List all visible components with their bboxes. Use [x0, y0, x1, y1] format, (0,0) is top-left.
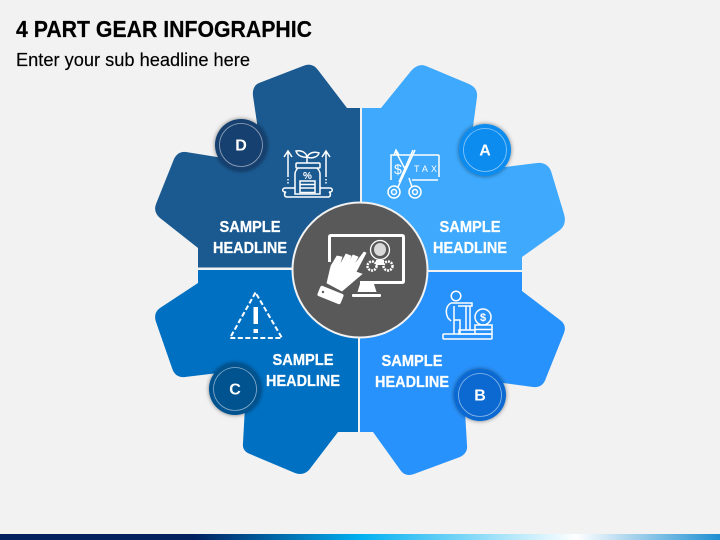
bottom gradient bar [0, 534, 720, 540]
icon: touching monitor with brain bulb [317, 236, 404, 305]
subtitle: Enter your sub headline here [16, 50, 250, 70]
badge C [209, 363, 261, 415]
badge B: B [474, 388, 486, 404]
panel: B gear segment [360, 272, 565, 475]
icon: scissors cutting tax ticket: $ [394, 161, 402, 177]
center circle [292, 202, 428, 338]
badge D: D [235, 138, 247, 154]
icon: jar with coins and arrows [283, 151, 332, 197]
panel: D gear segment [155, 65, 360, 268]
icon: scissors cutting tax ticket [388, 150, 439, 198]
heading: C: SAMPLE [272, 352, 334, 369]
title: 4 PART GEAR INFOGRAPHIC [16, 16, 312, 42]
heading: B: HEADLINE [375, 374, 449, 391]
badge C: C [229, 382, 241, 398]
heading: A: SAMPLE [440, 219, 501, 236]
badge D [215, 119, 267, 171]
icon: warning triangle [230, 292, 282, 338]
heading: A: HEADLINE [433, 240, 507, 257]
panel: A gear segment [362, 65, 565, 270]
badge A: A [479, 142, 491, 160]
heading: C: HEADLINE [266, 373, 340, 390]
icon: scissors cutting tax ticket: TAX [414, 164, 437, 174]
heading: D: HEADLINE [213, 240, 287, 257]
heading: B: SAMPLE [382, 353, 443, 370]
heading: D: SAMPLE [220, 219, 281, 236]
icon: person with coins: $ [480, 312, 486, 324]
icon: person with coins [443, 291, 492, 339]
icon: jar with coins and arrows: % [303, 171, 312, 182]
badge A [459, 124, 511, 176]
badge B [454, 369, 506, 421]
panel: C gear segment [155, 270, 358, 474]
